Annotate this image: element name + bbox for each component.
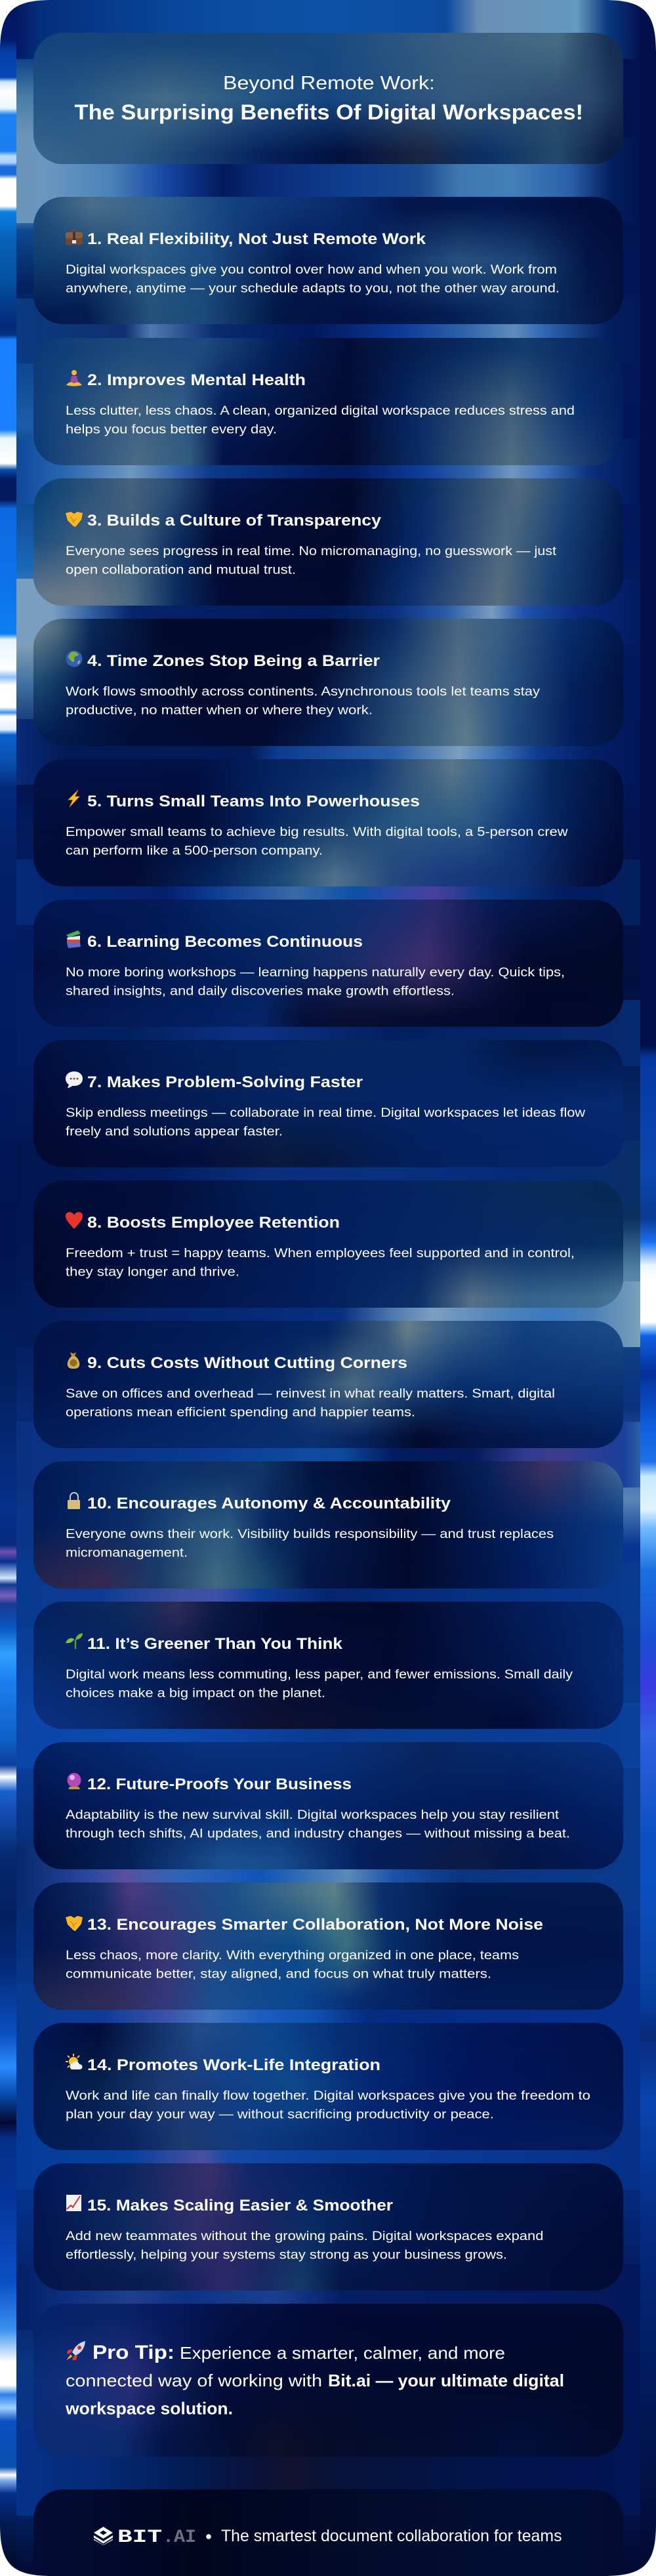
bullet bbox=[206, 2534, 211, 2539]
icon: globe bbox=[66, 651, 83, 667]
background: right outer strip with bright streaks bbox=[640, 0, 656, 2576]
icon: crystal ball bbox=[67, 1773, 81, 1789]
body line 2: freely and solutions appear faster. bbox=[66, 1125, 283, 1139]
body line 1: Work flows smoothly across continents. Asynchronous tools let teams stay bbox=[66, 685, 541, 699]
pro tip label: Pro Tip: bbox=[92, 2342, 174, 2363]
background: left outer strip with bright streaks bbox=[0, 0, 16, 2576]
body line 1: Adaptability is the new survival skill. Digital workspaces help you stay resilient bbox=[66, 1808, 560, 1822]
body line 2: communicate better, stay aligned, and focus on what truly matters. bbox=[66, 1967, 491, 1982]
heading: 15. Makes Scaling Easier & Smoother bbox=[87, 2197, 393, 2214]
body line 2: anywhere, anytime — your schedule adapts to you, not the other way around. bbox=[66, 282, 560, 295]
panel: benefit 7 bbox=[33, 1040, 623, 1167]
icon: bit.ai logo bbox=[94, 2527, 113, 2545]
icon: briefcase bbox=[66, 230, 83, 245]
body line 1: No more boring workshops — learning happens naturally every day. Quick tips, bbox=[66, 966, 565, 980]
heading: 6. Learning Becomes Continuous bbox=[87, 933, 363, 951]
panel: title header bbox=[33, 33, 623, 164]
pro tip line 2 regular: connected way of working with bbox=[66, 2371, 322, 2390]
title line 1: Beyond Remote Work: bbox=[223, 73, 435, 94]
panel: benefit 1 bbox=[33, 197, 623, 324]
heading: 11. It’s Greener Than You Think bbox=[87, 1635, 343, 1653]
icon: rocket bbox=[66, 2341, 85, 2360]
body line 1: Less chaos, more clarity. With everything organized in one place, teams bbox=[66, 1949, 519, 1963]
icon: meditating person bbox=[66, 370, 82, 386]
body line 1: Digital work means less commuting, less paper, and fewer emissions. Small daily bbox=[66, 1668, 573, 1682]
heading: 9. Cuts Costs Without Cutting Corners bbox=[87, 1354, 407, 1372]
brand name BIT: BIT bbox=[117, 2527, 162, 2548]
panel: benefit 4 bbox=[33, 619, 623, 746]
body line 2: operations mean efficient spending and happier teams. bbox=[66, 1405, 415, 1420]
brand name .AI: .AI bbox=[163, 2527, 196, 2548]
icon: padlock bbox=[68, 1493, 80, 1509]
body line 2: open collaboration and mutual trust. bbox=[66, 563, 296, 577]
body line 1: Skip endless meetings — collaborate in real time. Digital workspaces let ideas flow bbox=[66, 1106, 585, 1120]
title line 2: The Surprising Benefits Of Digital Workspaces! bbox=[75, 100, 583, 124]
heading: 2. Improves Mental Health bbox=[87, 371, 306, 389]
heading: 4. Time Zones Stop Being a Barrier bbox=[87, 652, 380, 670]
body line 2: productive, no matter when or where they work. bbox=[66, 703, 373, 718]
pro tip line 1: Experience a smarter, calmer, and more bbox=[180, 2343, 505, 2363]
body line 1: Work and life can finally flow together. Digital workspaces give you the freedom to bbox=[66, 2089, 590, 2103]
icon: stack of books bbox=[66, 930, 81, 948]
body line 2: through tech shifts, AI updates, and industry changes — without missing a beat. bbox=[66, 1827, 570, 1841]
pro tip line 3: workspace solution. bbox=[65, 2399, 233, 2419]
heading: 10. Encourages Autonomy & Accountability bbox=[87, 1495, 451, 1512]
panel: benefit 8 bbox=[33, 1180, 623, 1308]
panel: benefit 6 bbox=[33, 900, 623, 1027]
panel: benefit 13 bbox=[33, 1882, 623, 2010]
panel: benefit 3 bbox=[33, 478, 623, 606]
icon: red heart bbox=[66, 1212, 83, 1229]
body line 2: can perform like a 500-person company. bbox=[66, 844, 323, 858]
heading: 14. Promotes Work-Life Integration bbox=[87, 2056, 380, 2074]
icon: sun behind cloud bbox=[66, 2054, 83, 2069]
background: right margin bbox=[575, 0, 640, 2576]
panel: benefit 14 bbox=[33, 2023, 623, 2150]
heading: 8. Boosts Employee Retention bbox=[87, 1214, 340, 1232]
pro tip line 2 bold: Bit.ai — your ultimate digital bbox=[328, 2371, 564, 2390]
body line 2: helps you focus better every day. bbox=[66, 423, 277, 437]
icon: rising chart bbox=[66, 2195, 81, 2211]
panel: benefit 15 bbox=[33, 2163, 623, 2291]
heading: 3. Builds a Culture of Transparency bbox=[87, 512, 382, 530]
panel: benefit 2 bbox=[33, 338, 623, 465]
background: left margin bbox=[16, 0, 82, 2576]
body line 1: Empower small teams to achieve big results. With digital tools, a 5-person crew bbox=[66, 825, 568, 839]
heading: 12. Future-Proofs Your Business bbox=[87, 1776, 352, 1793]
panel: benefit 12 bbox=[33, 1742, 623, 1869]
body line 1: Less clutter, less chaos. A clean, organized digital workspace reduces stress and bbox=[66, 404, 575, 418]
body line 1: Add new teammates without the growing pains. Digital workspaces expand bbox=[66, 2230, 543, 2243]
heading: 5. Turns Small Teams Into Powerhouses bbox=[87, 793, 420, 810]
icon: handshake bbox=[66, 512, 83, 527]
icon: money bag bbox=[68, 1352, 79, 1369]
icon: handshake bbox=[66, 1916, 83, 1931]
body line 1: Save on offices and overhead — reinvest in what really matters. Smart, digital bbox=[66, 1387, 555, 1401]
body line 2: micromanagement. bbox=[66, 1546, 188, 1560]
body line 1: Freedom + trust = happy teams. When employees feel supported and in control, bbox=[66, 1247, 575, 1260]
body line 2: shared insights, and daily discoveries make growth effortless. bbox=[66, 984, 455, 999]
body line 2: they stay longer and thrive. bbox=[66, 1265, 239, 1279]
heading: 1. Real Flexibility, Not Just Remote Work bbox=[87, 230, 426, 248]
panel: benefit 10 bbox=[33, 1461, 623, 1589]
heading: 13. Encourages Smarter Collaboration, Not More Noise bbox=[87, 1916, 543, 1934]
body line 2: effortlessly, helping your systems stay strong as your business grows. bbox=[66, 2248, 507, 2262]
tagline: The smartest document collaboration for teams bbox=[221, 2527, 562, 2545]
panel: benefit 5 bbox=[33, 759, 623, 886]
panel: footer bbox=[33, 2489, 623, 2576]
body line 1: Everyone owns their work. Visibility builds responsibility — and trust replaces bbox=[66, 1527, 554, 1541]
heading: 7. Makes Problem-Solving Faster bbox=[87, 1073, 363, 1091]
panel: pro tip bbox=[33, 2304, 623, 2457]
body line 1: Everyone sees progress in real time. No micromanaging, no guesswork — just bbox=[66, 545, 557, 558]
icon: speech bubble bbox=[66, 1071, 83, 1088]
body line 2: plan your day your way — without sacrificing productivity or peace. bbox=[66, 2108, 494, 2122]
icon: lightning bolt bbox=[68, 790, 79, 807]
panel: benefit 11 bbox=[33, 1602, 623, 1729]
body line 2: choices make a big impact on the planet. bbox=[66, 1686, 325, 1701]
icon: seedling bbox=[66, 1633, 83, 1649]
body line 1: Digital workspaces give you control over how and when you work. Work from bbox=[66, 263, 557, 277]
panel: benefit 9 bbox=[33, 1321, 623, 1448]
